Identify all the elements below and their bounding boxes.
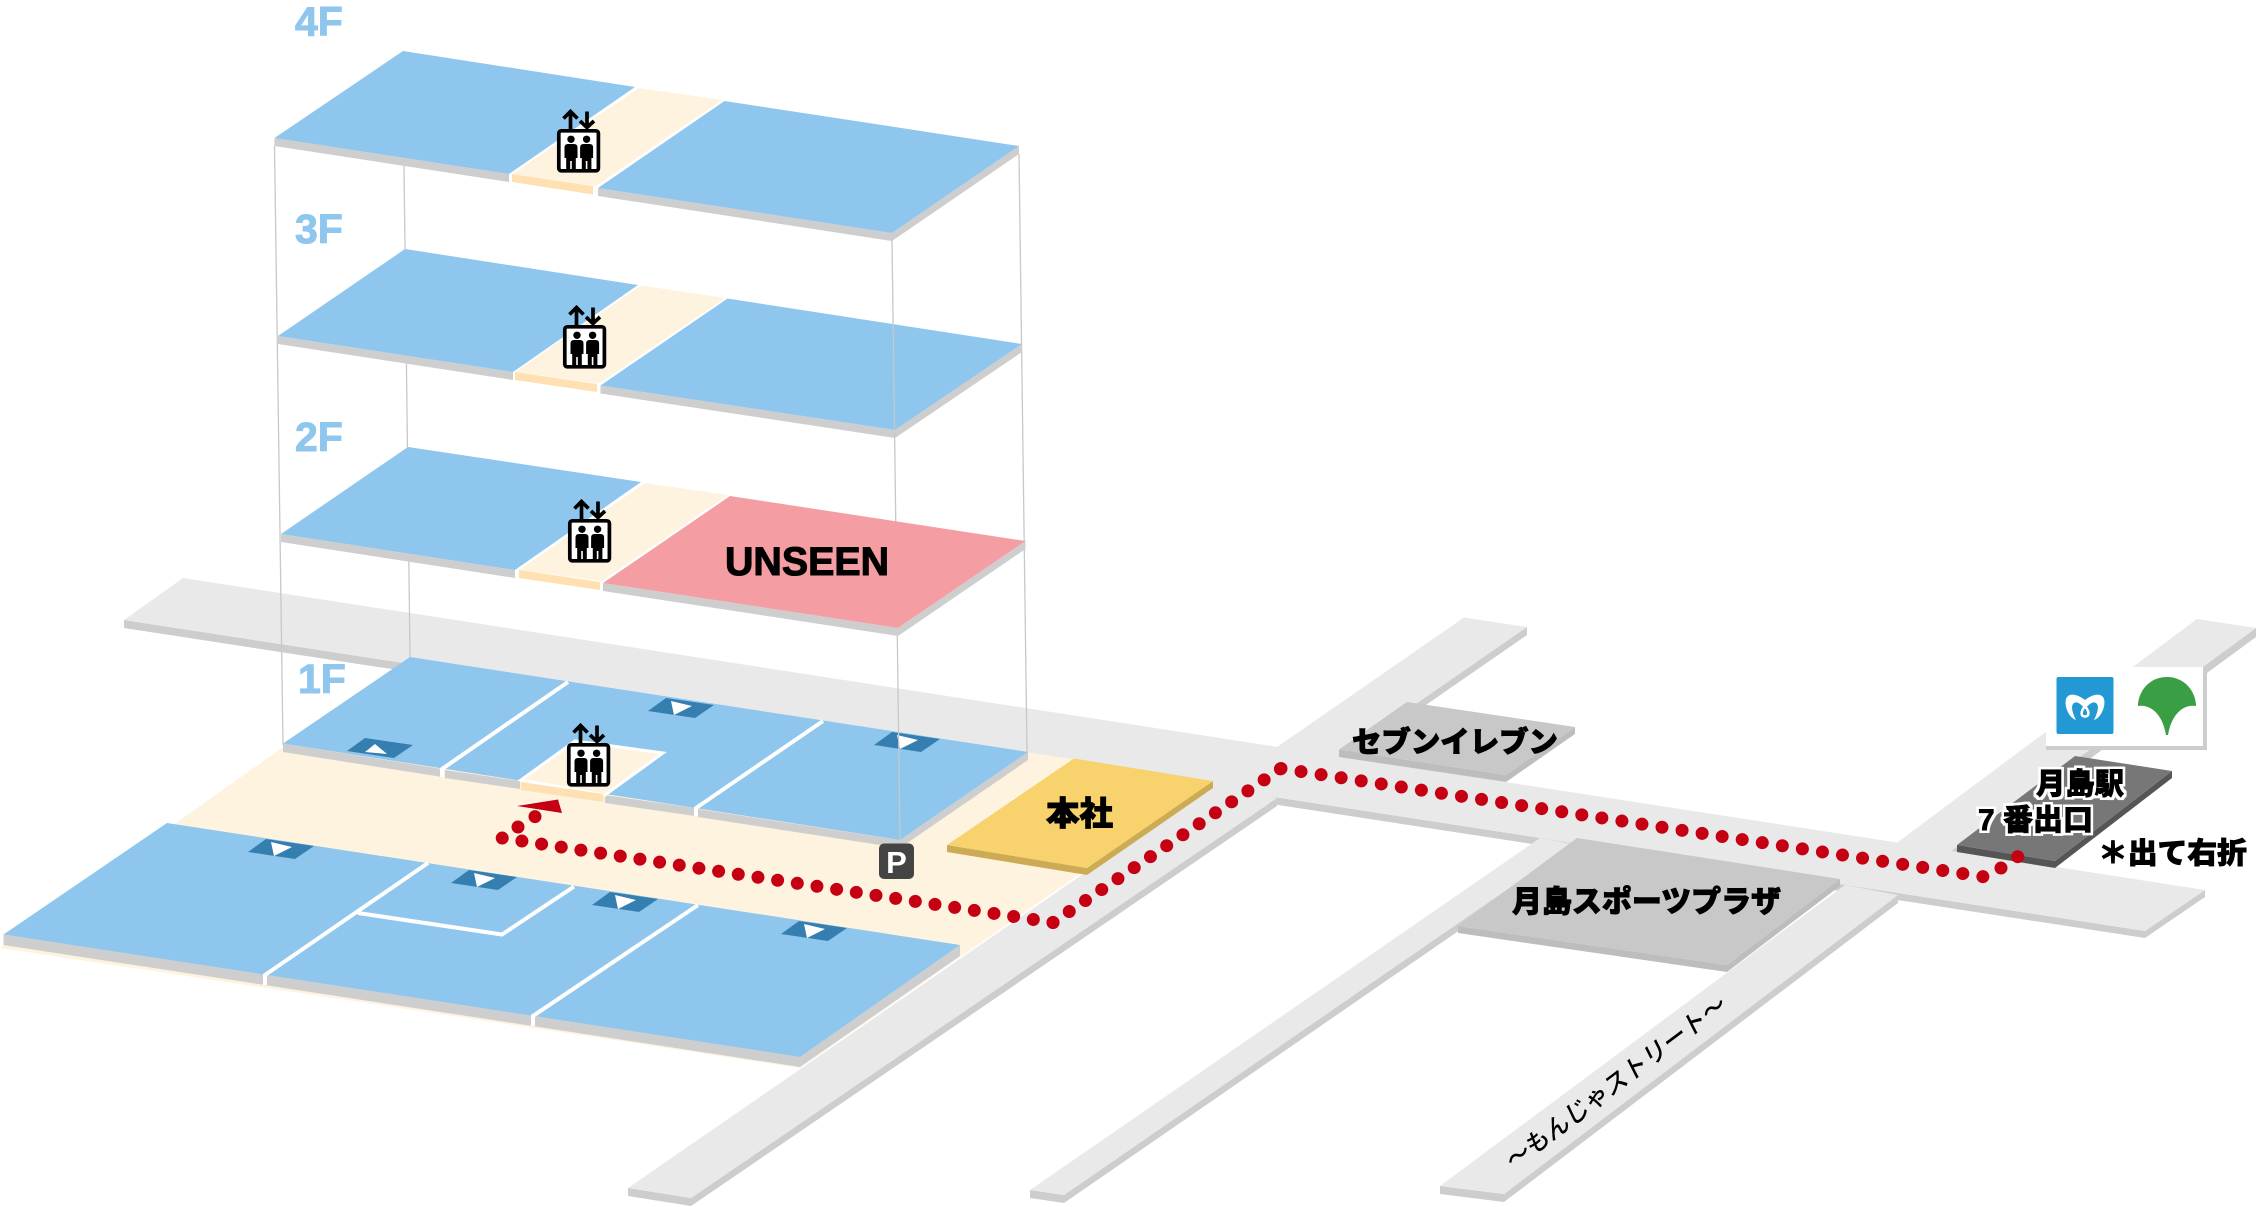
elevator icon 4F [559,112,598,171]
subway station exit 7 [1957,756,2172,868]
street label: monja street: 〜もんじゃストリート〜 [1503,990,1730,1176]
icon: tokyo metro [2056,677,2114,734]
building: tsukishima sports plaza [1458,838,1840,972]
icon: toei ginkgo [2138,677,2196,735]
subway station exit 7: 月島駅 [2036,768,2124,801]
floor label 3F: 3F [295,206,343,252]
building: head office: 本社 [1046,795,1113,832]
subway station exit 7: 7 番出口 [1978,804,2093,837]
floor label 1F: 1F [298,656,346,702]
4F floor [274,51,1019,241]
shop entrance markers [248,698,940,941]
1F rear block [283,657,1028,848]
building: head office [947,758,1213,875]
ground floor plaza [0,657,1214,1068]
elevator icon 1F [569,726,608,785]
2F floor: UNSEEN [725,540,889,584]
building: tsukishima sports plaza: 月島スポーツプラザ [1512,885,1781,919]
parking icon: P [886,845,907,880]
station logo card [2046,667,2207,750]
2F floor [281,447,1026,636]
elevator icon 2F [570,502,609,561]
building: seven eleven: セブンイレブン [1352,725,1558,759]
route arrow head [517,800,562,813]
parking icon [879,844,914,880]
walking route dots [502,768,2018,922]
building support lines [274,146,1027,752]
road network [124,578,2256,1206]
floor label 2F: 2F [295,414,343,460]
building: seven eleven [1339,702,1575,782]
front corner support line [892,240,900,840]
1F front block [4,823,960,1067]
note: turn right after exit: ＊出て右折 [2098,837,2247,870]
elevator icon 3F [565,308,604,367]
3F floor [278,249,1022,438]
UNSEEN tenant space [603,496,1026,628]
